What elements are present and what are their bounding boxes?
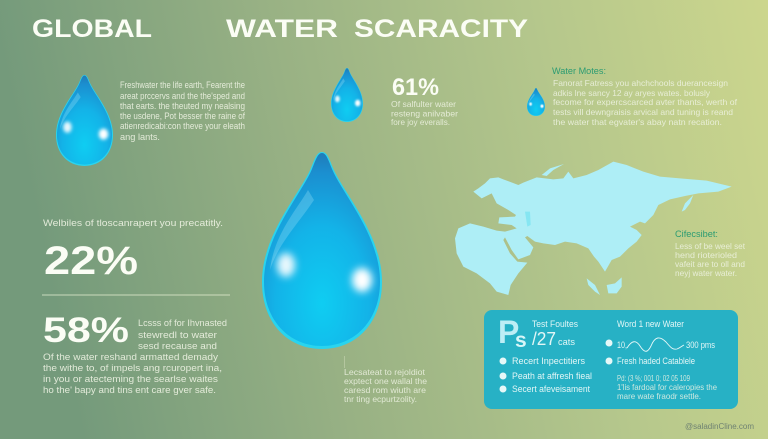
panel note: 1'lis fardoal for caleropies the [617,382,717,392]
title: SCARACITY [354,15,528,43]
stat: 61 percent: resteng anilvaber [391,108,458,118]
text block: websites note: Welbiles of tloscanrapert you precatitly. [43,218,223,229]
title [32,15,528,43]
text block: freshwater intro: the usdene, Pot besser the raine of [120,111,245,122]
panel stat: 27 cats [532,329,576,349]
stat: 58 percent: Of the water reshand armatted demady [43,352,218,363]
left bullet list: Secert afeveisament [512,384,590,394]
big Ps logo: s [515,329,527,352]
caption under central drop: caresd rom wiuth are [344,385,426,395]
text block: water motes: Water Motes: [552,66,606,76]
left bullet list: Recert Inpectitiers [512,356,585,366]
title: GLOBAL [32,15,152,43]
text block: map note: hend rioterioled [675,250,737,260]
text block: water motes: tests vill dewngraisis arvical and tuning is reand [553,107,733,117]
text block: map note: Cifecsibet: [675,229,718,239]
panel stat: 27 cats: cats [558,337,576,347]
line chart row: 300 pms [686,340,715,350]
text block: map note: neyj water water. [675,268,737,278]
big Ps logo: P [498,314,519,350]
panel heading left: Test Foultes [532,319,578,329]
text block: freshwater intro: atienredicabi:con theve your eleath [120,121,245,132]
stat: 61 percent [391,74,458,127]
stat: 61 percent: Of salfulter water [391,99,456,109]
stat: 58 percent: the withe to, of impels ang rcuropert ina, [43,363,222,374]
line chart row: 10, [617,340,627,350]
right list item: Fresh haded Catablele [617,356,695,366]
icon: right water drop [527,88,545,116]
stat: 58 percent: 58% [43,311,129,350]
panel heading right: Word 1 new Water [617,319,684,329]
text block: freshwater intro [120,80,245,143]
text block: map note [675,229,746,278]
stat: 58 percent [43,311,227,396]
panel note: mare wate fraodr settle. [617,391,701,401]
text block: freshwater intro: areat prccervs and the the'sped and [120,91,245,102]
caption under central drop: tnr ting ecpurtzolity. [344,394,417,404]
stat: 58 percent: in you or atecteming the searlse waites [43,374,218,385]
text block: map note: vafeit are to oll and [675,259,745,269]
stat: 58 percent: Lcsss of for Ihvnasted [138,318,227,329]
text block: freshwater intro: that earts. the theuted my nealsing [120,101,245,112]
text block: water motes: fecome for expercscarced avter thants, werth of [553,97,738,107]
text block: map note: Less of be weel set [675,241,746,251]
text block: water motes: Fanorat Fatress you ahchchools duerancesign [553,78,728,88]
stat: 58 percent: ho the' bapy and tins ent care gver safe. [43,385,216,396]
stat: 61 percent: fore joy everalls. [391,117,450,127]
icon: large central water drop [262,152,382,349]
text block: freshwater intro: ang lants. [120,132,160,143]
icon: middle water drop [331,68,363,122]
text block: freshwater intro: Freshwater the life earth, Fearent the [120,80,245,91]
world map [455,162,732,295]
panel note: Pd: (3 %; 001 0; 02 05 109 [617,373,690,383]
stat: 22 percent: 22% [44,239,138,283]
caption under central drop: exptect one wallal the [344,376,427,386]
stat: 58 percent: sesd recause and [138,341,217,352]
panel: test features [484,310,738,409]
line chart row [606,338,715,351]
left bullet list: Peath at affresh fieal [512,371,592,381]
caption under central drop [344,356,427,404]
text block: water motes [552,66,738,127]
panel note [617,373,717,401]
panel stat: 27 cats: /27 [532,329,556,349]
title: WATER [226,15,338,43]
caption under central drop: Lecsateat to rejoldiot [344,367,426,377]
stat: 58 percent: stewredl to water [138,330,217,341]
text block: water motes: adkis lne sancy 12 ay aryes wates. bolusly [553,88,711,98]
left bullet list [500,356,592,394]
icon: left water drop [56,75,113,166]
text block: water motes: the water that egvater's abay natn recation. [553,117,722,127]
credit: @saladinCline.com [685,422,754,431]
stat: 61 percent: 61% [392,74,439,101]
